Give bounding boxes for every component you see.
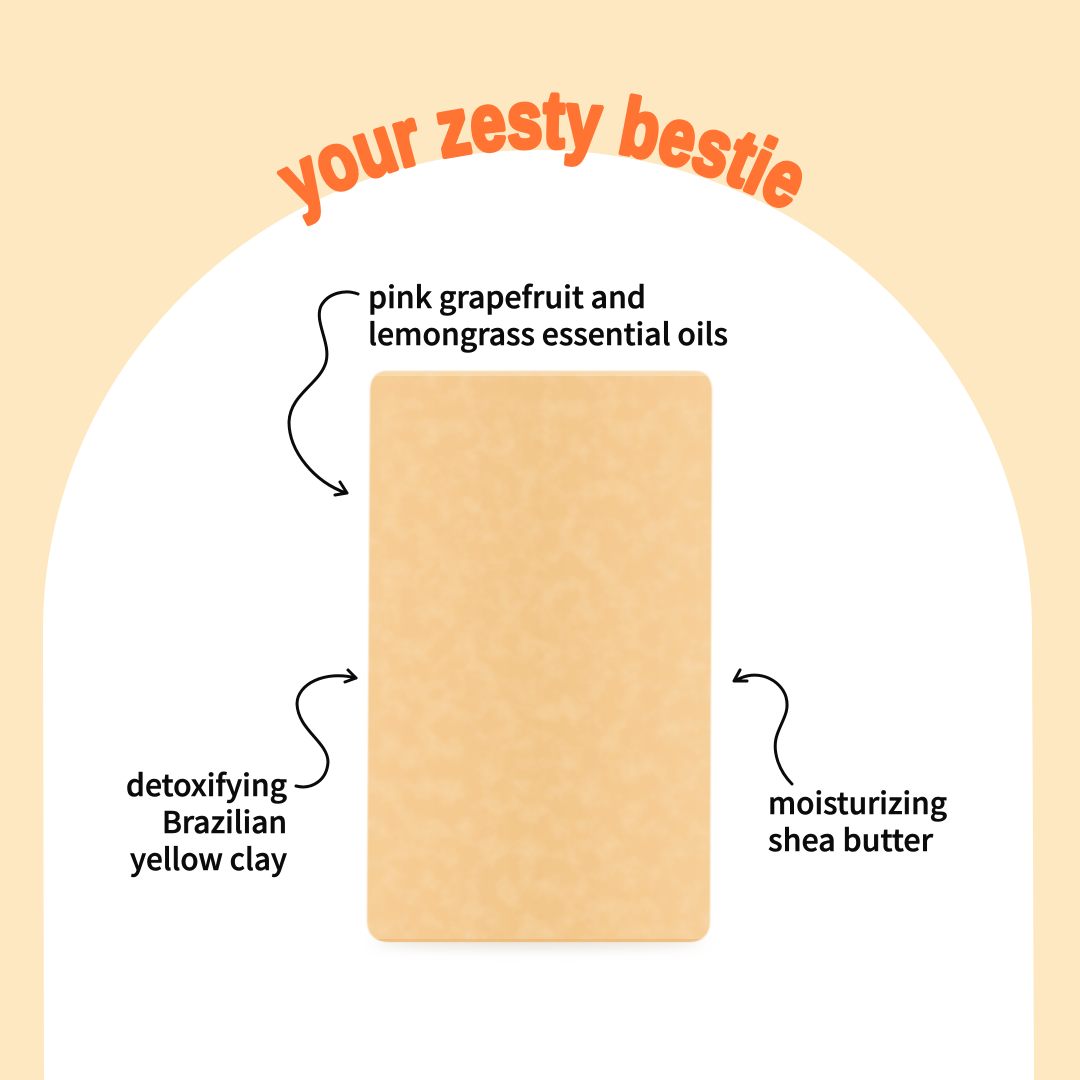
arrow: to soap from essential oils label: [289, 292, 358, 495]
soap bar: [360, 365, 720, 950]
label: detoxifying Brazilian yellow clay: [126, 761, 287, 879]
label: pink grapefruit and lemongrass essential oils: lemongrass essential oils: [368, 310, 728, 354]
label: detoxifying Brazilian yellow clay: Brazilian: [162, 798, 287, 842]
label: detoxifying Brazilian yellow clay: yellow clay: [130, 835, 287, 879]
label: moisturizing shea butter: [768, 779, 947, 860]
label: pink grapefruit and lemongrass essential oils: [368, 273, 728, 354]
title: your zesty bestie: your zesty bestie: [276, 92, 802, 226]
label: moisturizing shea butter: moisturizing: [768, 779, 947, 823]
label: detoxifying Brazilian yellow clay: detoxifying: [126, 761, 287, 805]
arrow: to soap from shea butter label: [734, 670, 792, 784]
label: pink grapefruit and lemongrass essential oils: pink grapefruit and: [368, 273, 646, 317]
label: moisturizing shea butter: shea butter: [768, 816, 934, 860]
arrow: to soap from clay label: [296, 670, 356, 787]
white arch panel: [43, 150, 1034, 1080]
